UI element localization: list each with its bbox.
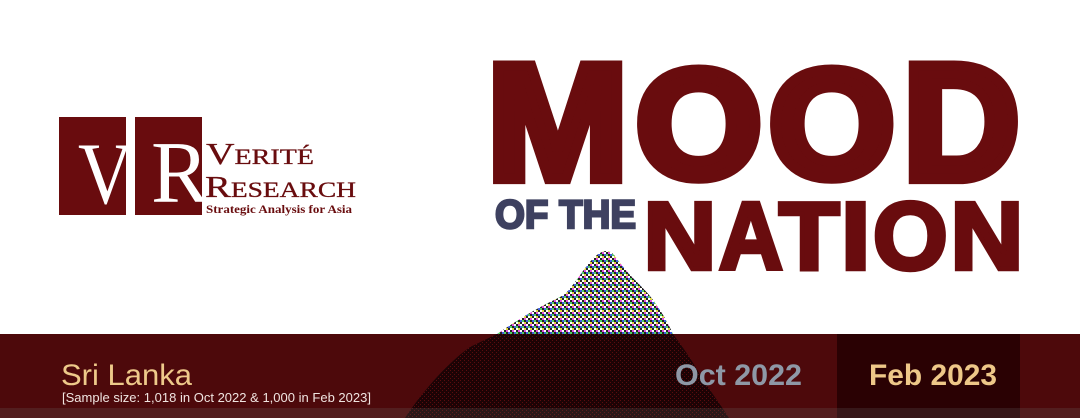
logo: V monogram: V [78,126,133,223]
logo: tagline: Strategic Analysis for Asia [206,202,352,216]
logo: left square [59,117,126,215]
title: MOOD: D [903,30,1020,214]
title: MOOD: O [636,39,762,210]
title: NATION: O [873,183,948,290]
title: NATION: N [950,182,1023,289]
title: MOOD: O [769,39,895,210]
illustration: mountain peak above band [497,251,673,334]
heading: Sri Lanka: Sri Lanka [61,359,192,392]
logo: Verité wordmark: V ERITÉ [206,136,314,171]
panel: bottom band [0,334,1080,418]
label: Feb 2023: Feb 2023 [869,359,997,392]
title: NATION: N [644,182,716,289]
title: MOOD: M [487,31,628,214]
illustration: mountain base inside band [405,334,729,418]
panel: Feb 2023 column highlight [837,334,1020,418]
logo: Research wordmark: RESEARCH [205,169,356,204]
decorative bottom strip [0,408,1080,418]
label: Oct 2022: Oct 2022 [675,359,802,392]
title: MOOD [487,30,1020,214]
title: OF THE: OF THE [495,193,636,237]
title: NATION: I [841,183,870,290]
logo: Verité Research [59,117,356,223]
logo: R monogram: R [151,125,209,222]
text: sample size note: [Sample size: 1,018 in Oct 2022 & 1,000 in Feb 2023] [62,390,371,405]
title: NATION: T [779,182,839,289]
title: NATION [644,182,1023,290]
title: NATION: A [719,182,783,290]
logo: right square [135,117,202,215]
